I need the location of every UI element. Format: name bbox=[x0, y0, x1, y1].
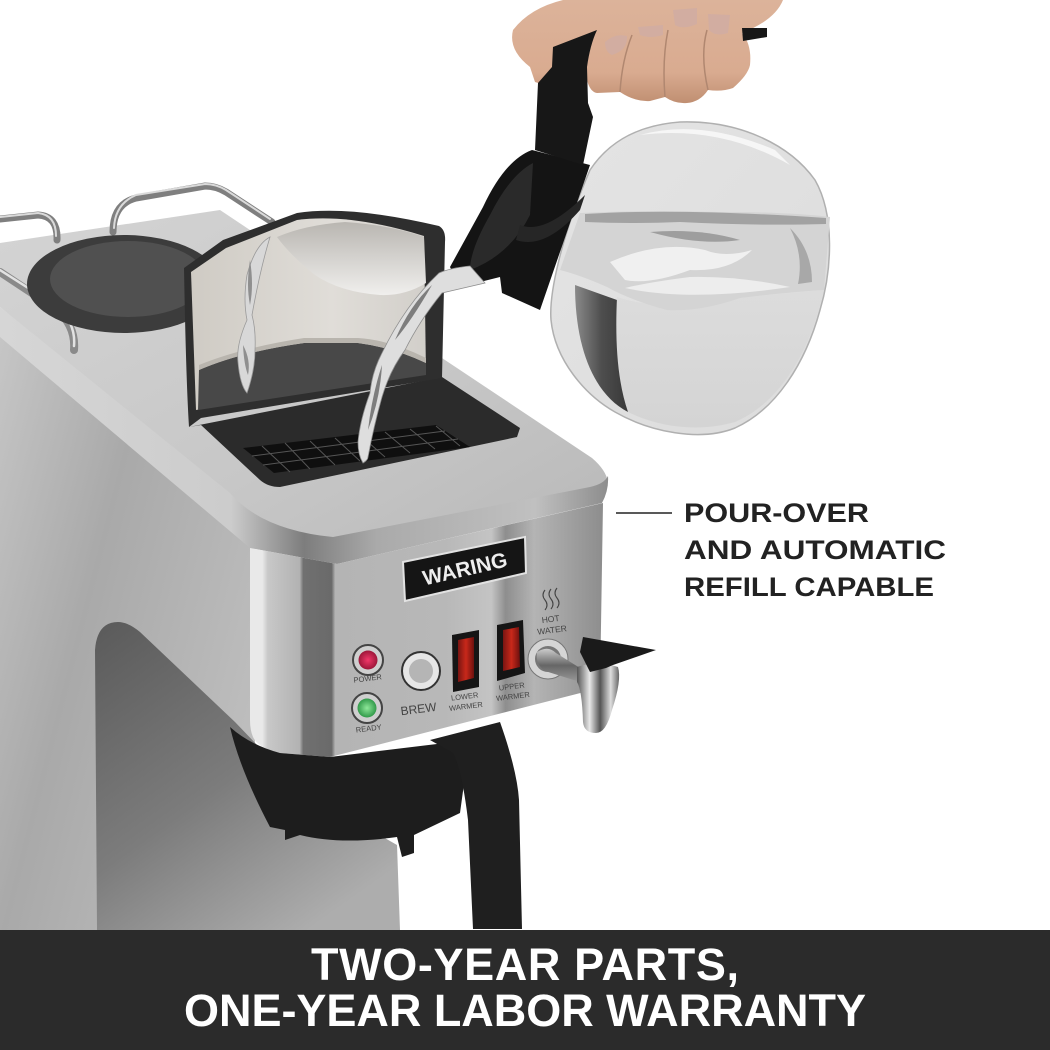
hot water label bbox=[535, 588, 567, 637]
warmer plate bbox=[27, 235, 221, 333]
callout text: AND AUTOMATIC bbox=[684, 535, 946, 565]
water stream inside lid bbox=[238, 237, 270, 393]
front panel bbox=[250, 503, 603, 757]
callout leader line bbox=[616, 512, 672, 514]
power indicator: POWER bbox=[353, 672, 383, 685]
water surface bbox=[560, 211, 830, 310]
ready indicator bbox=[352, 693, 382, 735]
pouring water stream bbox=[358, 266, 485, 463]
lid disc bbox=[450, 150, 590, 310]
brew opening bbox=[95, 622, 400, 930]
top front bevel bbox=[0, 307, 608, 564]
dark lens bbox=[575, 285, 628, 412]
brew button: BREW bbox=[400, 700, 438, 718]
warranty banner bbox=[0, 930, 1050, 1050]
glass globe bbox=[551, 122, 830, 435]
brew basket and funnel bbox=[230, 722, 522, 929]
hot water spigot bbox=[528, 637, 656, 733]
hot water label: WATER bbox=[537, 623, 567, 637]
side panel bbox=[0, 330, 255, 930]
coffee maker body bbox=[0, 184, 608, 930]
rail back left bbox=[0, 213, 57, 240]
hopper lid bbox=[184, 211, 445, 427]
Waring nameplate: WARING bbox=[421, 549, 510, 590]
handle grip bbox=[535, 30, 597, 165]
hopper tray bbox=[189, 377, 520, 487]
callout text: POUR-OVER bbox=[684, 498, 869, 528]
power indicator bbox=[353, 645, 383, 685]
callout text: REFILL CAPABLE bbox=[684, 572, 934, 602]
fingernails bbox=[605, 8, 730, 55]
water volume bbox=[616, 290, 824, 427]
warranty banner: TWO-YEAR PARTS, bbox=[311, 939, 739, 990]
carafe handle below bbox=[430, 722, 522, 929]
lower warmer switch: WARMER bbox=[449, 700, 484, 713]
upper warmer switch: WARMER bbox=[496, 690, 531, 703]
hot water label: HOT bbox=[541, 613, 560, 625]
carafe bbox=[551, 122, 830, 435]
Waring nameplate bbox=[403, 537, 526, 601]
ready indicator: READY bbox=[355, 722, 382, 735]
lower warmer switch: LOWER bbox=[450, 690, 479, 703]
carafe collar and handle bbox=[450, 28, 767, 310]
hand bbox=[512, 0, 783, 103]
handle strap bbox=[742, 28, 767, 41]
lower warmer switch bbox=[447, 630, 484, 713]
rail front bbox=[0, 270, 74, 350]
top plate bbox=[0, 210, 608, 548]
inner highlight bbox=[640, 129, 790, 165]
warranty banner: ONE-YEAR LABOR WARRANTY bbox=[184, 985, 866, 1036]
rail back right bbox=[113, 184, 272, 232]
brew button bbox=[400, 652, 440, 718]
callout text bbox=[684, 498, 946, 602]
upper warmer switch bbox=[494, 620, 531, 703]
upper warmer switch: UPPER bbox=[498, 680, 526, 693]
hopper grate bbox=[243, 425, 470, 473]
